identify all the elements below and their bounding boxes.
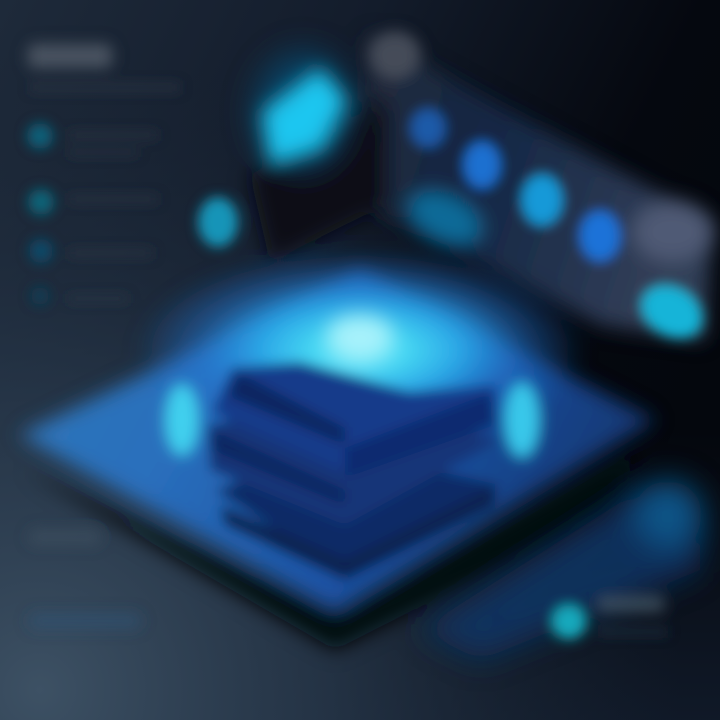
stack top tier [212, 362, 495, 472]
panel: right tilted card [250, 31, 712, 349]
icon: legend dot [552, 605, 586, 639]
caption line 1 [30, 530, 100, 544]
stack lower tier [215, 450, 500, 575]
icon: sidebar dot 1 [27, 123, 53, 149]
stack right face [345, 392, 495, 478]
heading placeholder [28, 44, 112, 68]
icon: sidebar dot 3 [29, 239, 53, 263]
card top-left highlight [369, 31, 421, 79]
icon: sidebar dot 2 [28, 189, 54, 215]
caption line 2 [30, 614, 140, 628]
left cyan arc [165, 384, 199, 456]
icon: large cyan diamond [253, 50, 353, 174]
platform shadow [25, 450, 640, 650]
icon: card dot 1 [411, 109, 445, 147]
icon: small cyan blob [198, 197, 238, 247]
server stack [208, 362, 500, 580]
panel: left sidebar list [27, 44, 180, 305]
legend label [598, 596, 664, 612]
legend sublabel [598, 629, 668, 635]
icon: card cyan block [399, 179, 491, 257]
legend: bottom right [552, 596, 668, 639]
stack middle groove [212, 430, 345, 505]
card right highlight [632, 202, 712, 262]
platform right extension [634, 481, 702, 549]
icon: card dot 2 [464, 142, 500, 188]
panel: isometric platform [20, 250, 702, 660]
platform surface [20, 270, 655, 612]
dark column left of card [250, 100, 385, 262]
icon: card dot 3 [522, 175, 562, 225]
icon: right cyan gem [632, 275, 712, 349]
central glow [135, 250, 585, 450]
lower right glow band [420, 490, 700, 660]
panel: bottom left caption [30, 530, 140, 628]
stack lower edge [220, 485, 495, 580]
glow core [328, 316, 392, 356]
stack top groove [228, 372, 345, 445]
sidebar text lines [30, 84, 180, 301]
stack middle tier [208, 400, 500, 525]
right cyan arc [504, 382, 540, 458]
icon: card dot 4 [580, 211, 620, 261]
icon: sidebar dot 4 [31, 287, 49, 305]
